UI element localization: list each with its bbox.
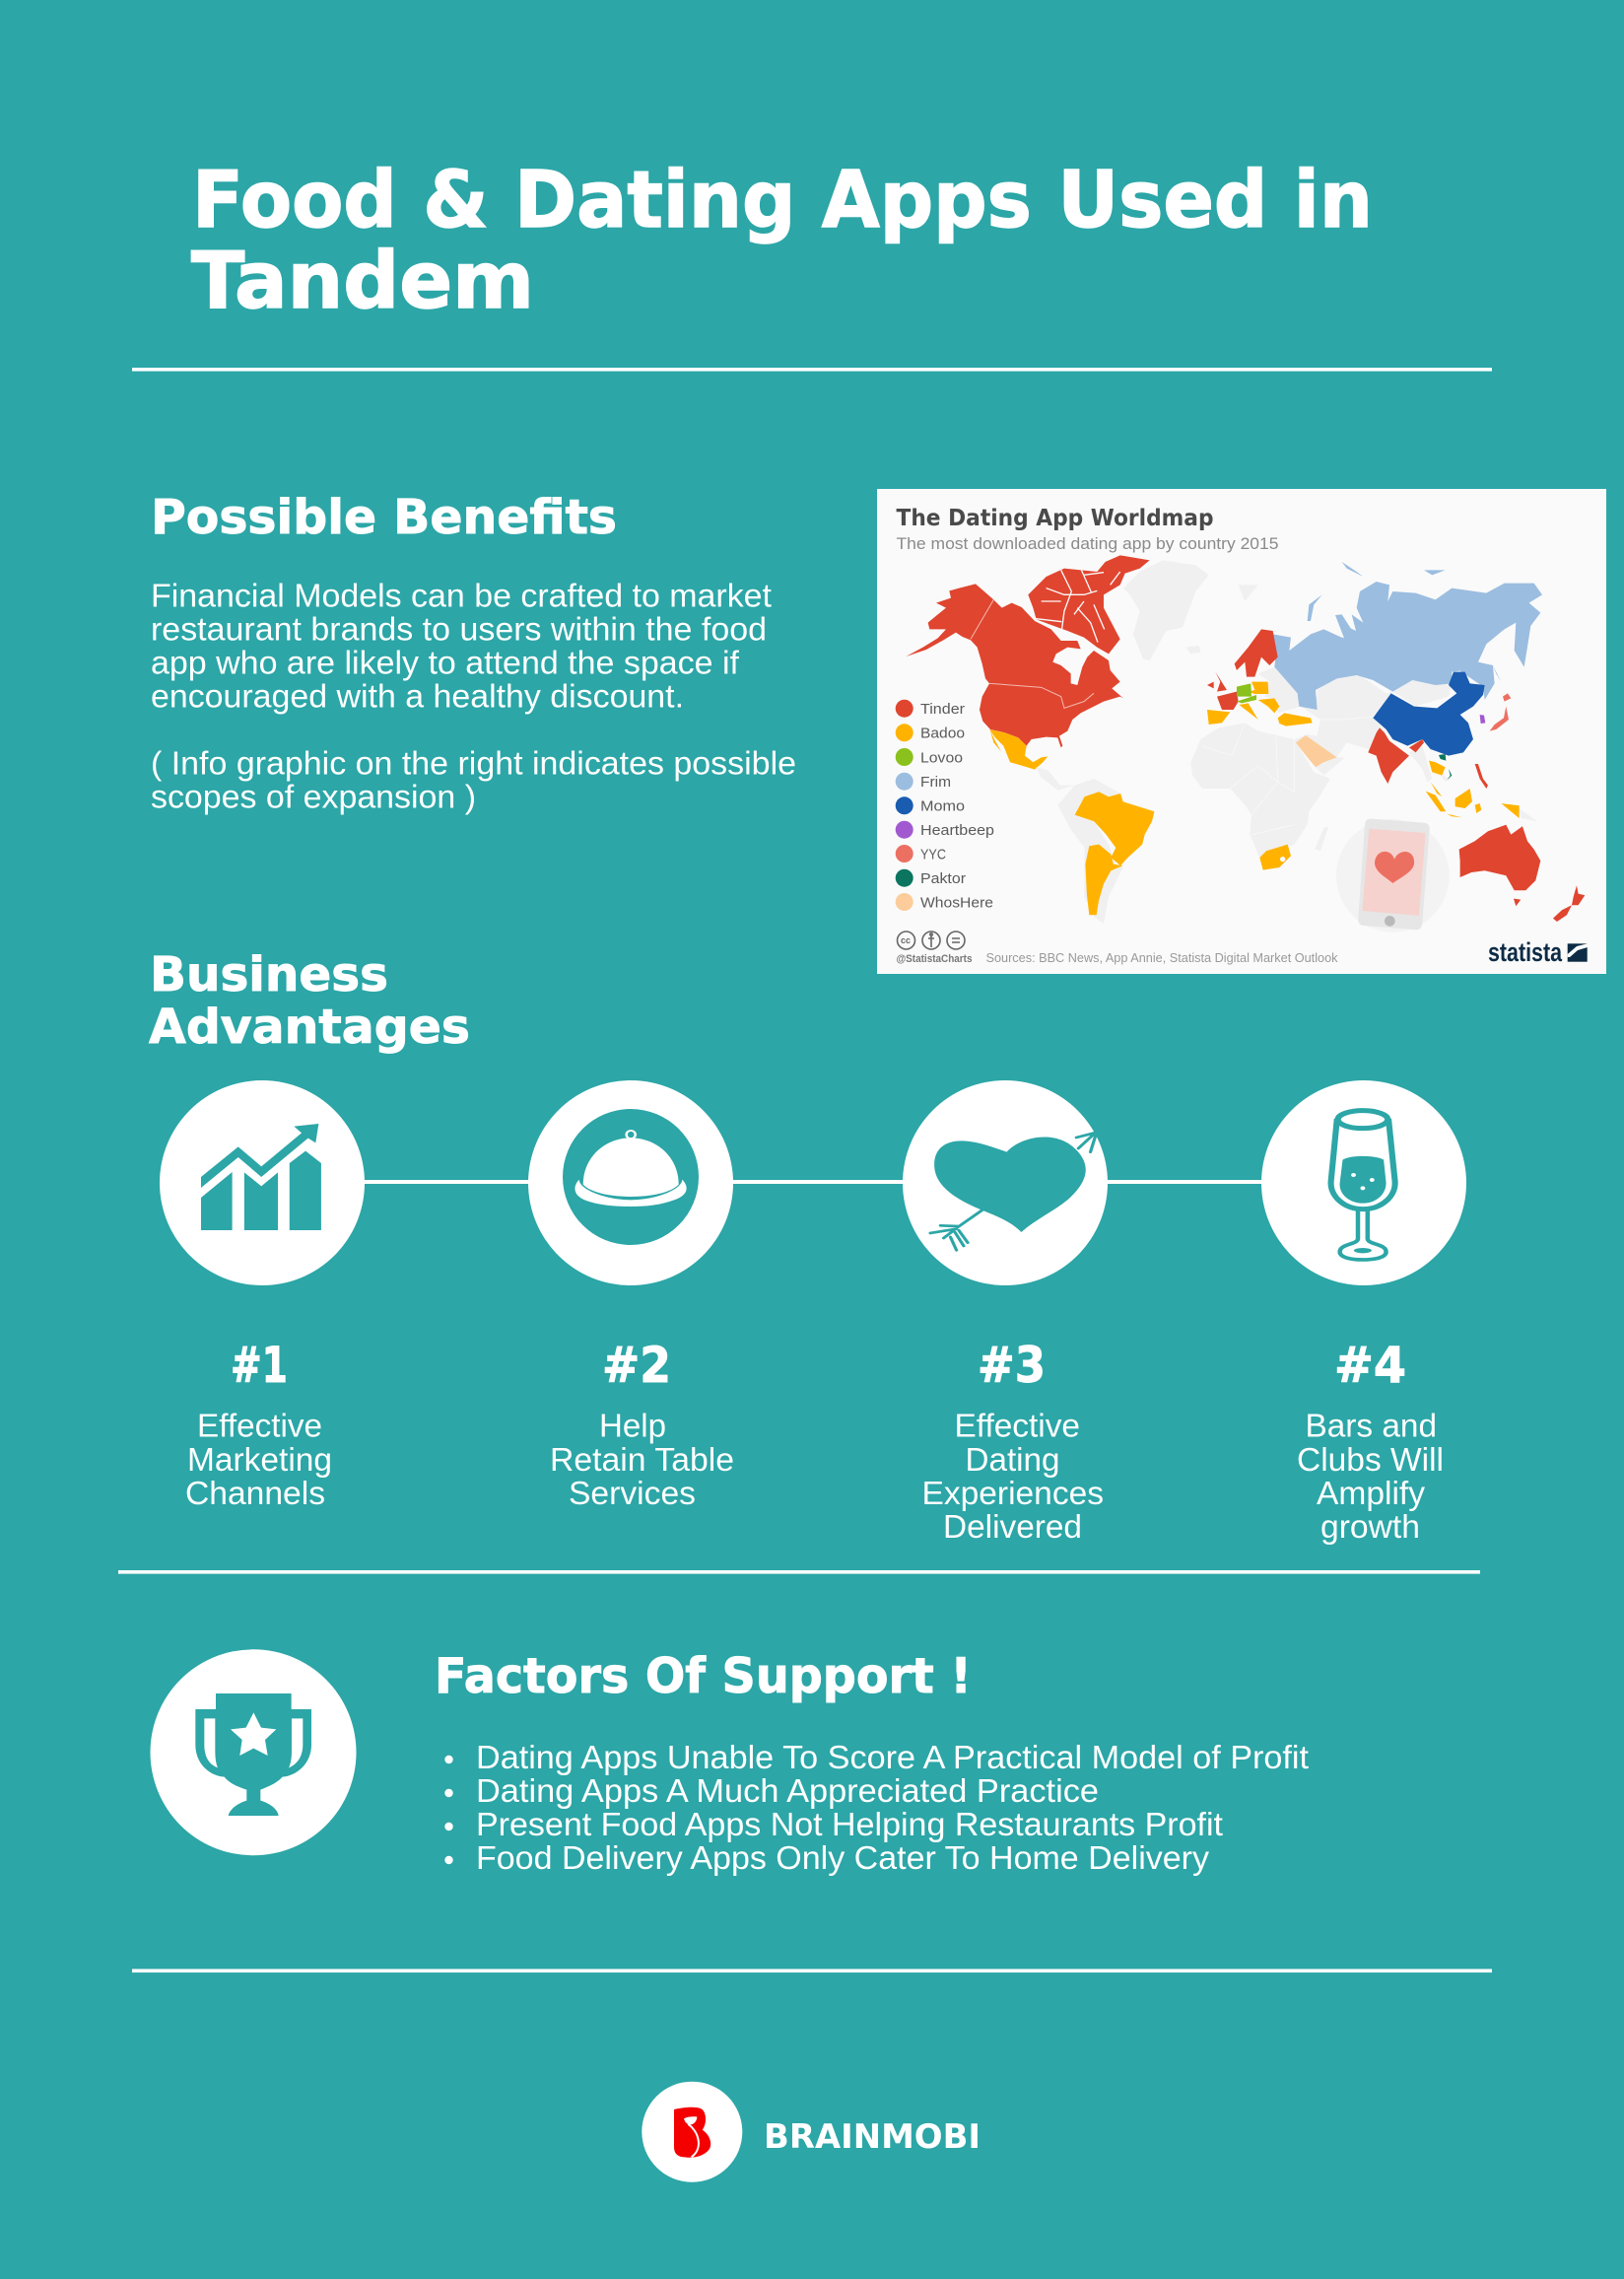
legend: Paktor (920, 870, 966, 887)
legend: Momo (920, 798, 965, 815)
step 2: Retain Table (550, 1442, 734, 1479)
legend: WhosHere (920, 894, 993, 911)
licence icons (897, 932, 965, 949)
world map: north america (906, 555, 1209, 770)
icon: heart with arrow (903, 1080, 1108, 1285)
map heading: The Dating App Worldmap (897, 506, 1214, 531)
step 3: Delivered (943, 1509, 1082, 1546)
title: Tandem (191, 236, 534, 326)
world map: europe, asia, africa, oceania (1190, 562, 1585, 932)
step 2 (550, 1337, 734, 1512)
brand logo (642, 2082, 981, 2182)
heading: factors of support: Factors Of Support ! (435, 1648, 972, 1704)
text block: benefits: encouraged with a healthy discount. (151, 678, 684, 716)
step 4: #4 (1334, 1337, 1406, 1394)
heading: possible benefits: Possible Benefits (151, 490, 617, 545)
map heading (897, 506, 1279, 553)
step 1: Marketing (187, 1442, 332, 1479)
step 3: Effective (954, 1408, 1080, 1445)
step 3: Dating (966, 1442, 1060, 1479)
bullet list: factors: Dating Apps Unable To Score A Practical Model of Profit (476, 1740, 1310, 1776)
step 3: #3 (978, 1337, 1046, 1394)
icon: phone with heart (1336, 819, 1450, 932)
legend: Badoo (920, 725, 965, 742)
connector line (361, 1180, 1265, 1184)
map heading: The most downloaded dating app by country 2015 (897, 534, 1279, 553)
icon: trophy (150, 1649, 357, 1855)
legend: Tinder (920, 701, 965, 718)
step 4: growth (1320, 1509, 1420, 1546)
legend: YYC (920, 846, 946, 863)
heading: business advantages: Advantages (149, 1000, 470, 1055)
bullet list: factors: Present Food Apps Not Helping Restaurants Profit (476, 1807, 1224, 1843)
licence icons: cc (901, 935, 911, 945)
icon: food cloche (528, 1080, 733, 1285)
legend: Heartbeep (920, 822, 994, 839)
legend: Frim (920, 774, 951, 791)
heading: business advantages: Business (150, 947, 388, 1002)
step 1: Channels (185, 1476, 325, 1512)
brand logo: BRAINMOBI (764, 2117, 981, 2157)
heading: business advantages (149, 947, 470, 1055)
step 4: Amplify (1317, 1476, 1425, 1512)
step 1 (185, 1337, 332, 1512)
text block: benefits: app who are likely to attend the space if (151, 645, 740, 682)
step 2: Help (599, 1408, 666, 1445)
icon: growth chart (160, 1080, 365, 1285)
bullet list: factors: Dating Apps A Much Appreciated Practice (476, 1773, 1099, 1810)
text block: benefits: Financial Models can be crafted to market (151, 578, 773, 615)
text block: benefits: ( Info graphic on the right indicates possible (151, 745, 796, 783)
source line: Sources: BBC News, App Annie, Statista Digital Market Outlook (985, 950, 1338, 965)
statista logo: statista (1488, 937, 1563, 967)
text block: benefits: restaurant brands to users within the food (151, 611, 767, 649)
step 3: Experiences (922, 1476, 1104, 1512)
title (191, 155, 1373, 326)
bullet list: factors (444, 1740, 1310, 1877)
title: Food & Dating Apps Used in (192, 155, 1373, 245)
step 4: Bars and (1305, 1408, 1437, 1445)
legend (896, 700, 994, 911)
bullet list: factors: Food Delivery Apps Only Cater To Home Delivery (476, 1840, 1209, 1877)
text block: benefits (151, 578, 796, 816)
step 1: #1 (231, 1337, 288, 1394)
step 4 (1297, 1337, 1444, 1546)
world map: central and south america (1036, 767, 1154, 924)
legend: Lovoo (920, 749, 963, 766)
text block: benefits: scopes of expansion ) (151, 779, 476, 816)
icon: champagne glass (1261, 1080, 1466, 1285)
panel: dating app world map (118, 489, 1606, 2182)
step 1: Effective (197, 1408, 322, 1445)
step 2: #2 (602, 1337, 671, 1394)
source line: @StatistaCharts (897, 953, 972, 965)
step 4: Clubs Will (1297, 1442, 1444, 1479)
step 3 (922, 1337, 1104, 1546)
step 2: Services (569, 1476, 696, 1512)
